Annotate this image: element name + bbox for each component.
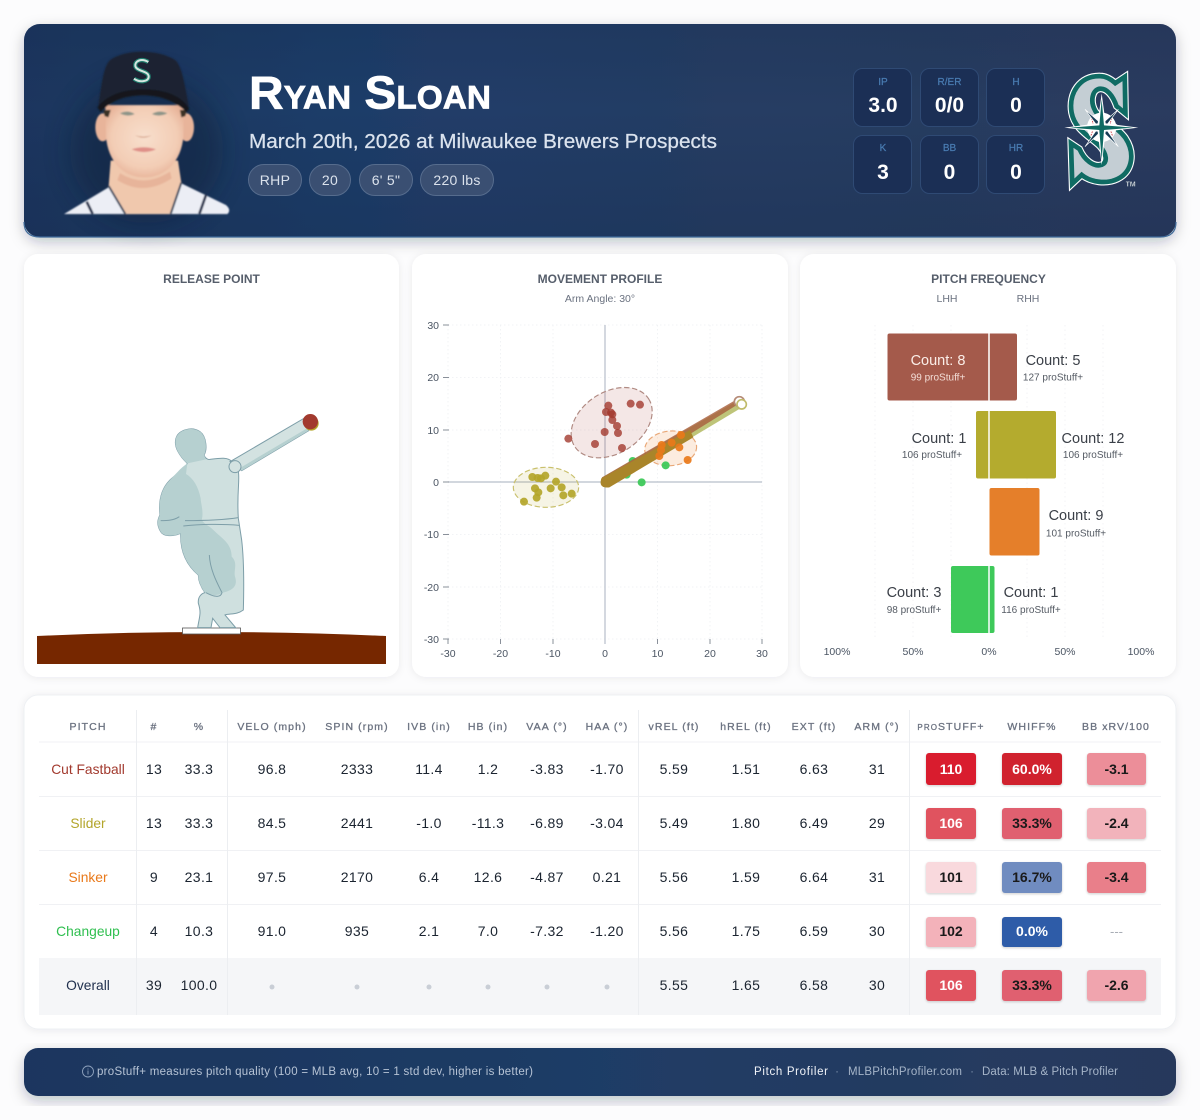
pitcher figure (158, 414, 319, 628)
row: cut fastball: 2333 (341, 761, 373, 777)
row: sinker: 31 (869, 869, 885, 885)
row: slider: -1.0 (416, 815, 442, 831)
row: sinker: 97.5 (258, 869, 286, 885)
movement scatter chart: -10 (545, 648, 561, 660)
heading: release point: RELEASE POINT (163, 272, 261, 286)
bar row: cut fastball: Count: 5 (1026, 353, 1080, 369)
row: overall: 106 (939, 977, 963, 993)
row: overall: 1.65 (732, 977, 760, 993)
icon: team logo: TM (1126, 182, 1136, 189)
row: cut fastball: -1.70 (590, 761, 624, 777)
row: changeup: 102 (939, 923, 963, 939)
stat tiles: 0 (944, 161, 955, 184)
row: changeup (56, 917, 1123, 947)
frequency axis: 50% (902, 646, 924, 658)
row: slider: 29 (869, 815, 885, 831)
panel: pitch metrics table (24, 695, 1176, 1029)
bar row: sinker: 101 proStuff+ (1046, 528, 1106, 540)
bar row: sinker (990, 488, 1106, 556)
row: slider: -2.4 (1104, 815, 1129, 831)
credits: · (835, 1066, 839, 1078)
header banner (24, 24, 1176, 237)
stat tiles: 0 (1010, 161, 1022, 184)
row: sinker: -4.87 (530, 869, 564, 885)
row: cut fastball: -3.83 (530, 761, 564, 777)
row: cut fastball (51, 753, 1146, 785)
bar row: changeup (887, 566, 1061, 633)
stat tiles: 0 (1010, 94, 1022, 117)
credits: Pitch Profiler (754, 1066, 828, 1078)
movement scatter chart: 20 (704, 648, 716, 660)
row: changeup: 2.1 (419, 923, 439, 939)
stat tiles: BB (943, 143, 956, 154)
movement scatter chart: 30 (756, 648, 768, 660)
bar row: slider: 106 proStuff+ (902, 450, 962, 461)
movement scatter chart: 0 (602, 648, 608, 660)
row: slider: 6.49 (800, 815, 828, 831)
row: sinker: 16.7% (1012, 869, 1052, 885)
table header: % (194, 721, 204, 733)
row: sinker: 9 (150, 869, 158, 885)
stat tiles: K (880, 143, 887, 154)
frequency axis: 50% (1054, 646, 1076, 658)
arm angle note: Arm Angle: 30° (565, 293, 635, 305)
row: slider: Slider (70, 816, 106, 831)
row: changeup: -7.32 (530, 923, 564, 939)
row: changeup: 7.0 (478, 923, 498, 939)
row: slider: 1.80 (732, 815, 760, 831)
row: changeup: 1.75 (732, 923, 760, 939)
row: sinker: 0.21 (593, 869, 621, 885)
game line: March 20th, 2026 at Milwaukee Brewers Prospects (249, 130, 717, 153)
row: cut fastball: 6.63 (800, 761, 828, 777)
row: slider: 33.3% (1012, 815, 1052, 831)
row: slider: 5.49 (660, 815, 688, 831)
row: sinker: 2170 (341, 869, 373, 885)
row: sinker: 101 (939, 869, 963, 885)
stat tiles: H (1012, 77, 1020, 88)
movement scatter chart (424, 320, 768, 660)
row: overall: Overall (66, 978, 110, 993)
row: overall: 30 (869, 977, 885, 993)
row: slider: 33.3 (185, 815, 213, 831)
table header (70, 721, 1150, 733)
row: cut fastball: Cut Fastball (51, 762, 125, 777)
row: changeup: 30 (869, 923, 885, 939)
row: sinker: -3.4 (1104, 869, 1129, 885)
row: sinker (68, 862, 1146, 893)
credits: MLBPitchProfiler.com (848, 1066, 962, 1078)
row: changeup: 10.3 (185, 923, 213, 939)
footer bar (24, 1048, 1176, 1096)
credits: Data: MLB & Pitch Profiler (982, 1066, 1118, 1078)
row: sinker: 23.1 (185, 869, 213, 885)
frequency bar chart (824, 325, 1154, 658)
row: cut fastball: 31 (869, 761, 885, 777)
row: slider: 2441 (341, 815, 373, 831)
heading: movement profile: MOVEMENT PROFILE (538, 272, 662, 286)
movement scatter chart: -30 (424, 634, 439, 646)
stat tiles (854, 68, 1044, 194)
row: overall: -2.6 (1104, 977, 1129, 993)
table header: VELO (mph) (237, 721, 307, 733)
player pills: 20 (322, 172, 338, 188)
row: overall: 33.3% (1012, 977, 1052, 993)
row: slider (70, 808, 1146, 839)
row: slider: 106 (939, 815, 963, 831)
bar row: changeup: 98 proStuff+ (887, 605, 941, 616)
frequency axis: 100% (1128, 646, 1154, 658)
row: cut fastball: 5.59 (660, 761, 688, 777)
row: changeup: 935 (345, 923, 369, 939)
row: slider: -3.04 (590, 815, 624, 831)
movement scatter chart: 10 (652, 648, 663, 660)
row: overall (66, 970, 1146, 1001)
hand labels: LHH (936, 293, 958, 305)
stat tiles: 3.0 (868, 94, 898, 117)
row: overall: 5.55 (660, 977, 688, 993)
table header: HB (in) (468, 721, 508, 733)
bar row: slider: Count: 12 (1062, 431, 1124, 447)
bar row: slider: Count: 1 (912, 431, 966, 447)
bar row: changeup: Count: 1 (1004, 585, 1058, 601)
player name: Ryan Sloan (249, 66, 491, 118)
bar row: cut fastball: 127 proStuff+ (1023, 372, 1083, 384)
row: slider: -11.3 (472, 815, 504, 831)
movement scatter chart: 20 (427, 372, 439, 384)
table header: # (151, 721, 157, 733)
movement scatter chart: 0 (433, 477, 439, 489)
stat tiles: 0/0 (935, 94, 964, 117)
bar row: cut fastball (888, 334, 1083, 400)
frequency axis: 100% (824, 646, 850, 658)
table header: IVB (in) (407, 721, 451, 733)
row: sinker: 5.56 (660, 869, 688, 885)
row: sinker: 12.6 (474, 869, 502, 885)
row: slider: 13 (146, 815, 162, 831)
table header: BB xRV/100 (1082, 721, 1150, 733)
hand labels: RHH (1017, 293, 1039, 305)
row: changeup: 91.0 (258, 923, 286, 939)
bar row: changeup: Count: 3 (887, 585, 941, 601)
bar row: sinker: Count: 9 (1049, 508, 1103, 524)
player photo (64, 52, 229, 223)
bar row: cut fastball: 99 proStuff+ (911, 372, 965, 384)
movement scatter chart: 10 (427, 425, 439, 437)
panel: movement profile (412, 254, 788, 677)
credits: · (970, 1066, 974, 1078)
row: overall: 6.58 (800, 977, 828, 993)
row: changeup: 6.59 (800, 923, 828, 939)
movement scatter chart: -20 (424, 582, 439, 594)
row: cut fastball: 11.4 (415, 761, 443, 777)
table header: vREL (ft) (649, 721, 699, 733)
row: cut fastball: 1.51 (732, 761, 760, 777)
methodology note: proStuff+ measures pitch quality (100 = MLB avg, 10 = 1 std dev, higher is better) (97, 1066, 533, 1078)
stat tiles: HR (1009, 143, 1023, 154)
row: sinker: 6.4 (419, 869, 439, 885)
movement scatter chart: -10 (424, 529, 439, 541)
movement scatter chart: -20 (493, 648, 508, 660)
bar row: slider (902, 411, 1124, 478)
table header: WHIFF% (1007, 721, 1057, 733)
row: cut fastball: -3.1 (1104, 761, 1129, 777)
row: cut fastball: 60.0% (1012, 761, 1052, 777)
release point markers (303, 414, 319, 431)
row: overall: 39 (146, 977, 162, 993)
row: cut fastball: 96.8 (258, 761, 286, 777)
stat tiles: IP (878, 77, 888, 88)
bar row: cut fastball: Count: 8 (911, 353, 965, 369)
row: sinker: 6.64 (800, 869, 828, 885)
frequency axis (824, 646, 1154, 658)
row: slider: 84.5 (258, 815, 286, 831)
row: changeup: 4 (150, 923, 158, 939)
bar row: slider: 106 proStuff+ (1063, 450, 1123, 461)
table header: ARM (°) (854, 721, 900, 733)
credits (754, 1066, 1118, 1078)
heading: pitch frequency: PITCH FREQUENCY (931, 272, 1046, 286)
row: cut fastball: 13 (146, 761, 162, 777)
hand labels (936, 293, 1039, 305)
row: changeup: --- (1110, 924, 1123, 939)
row: cut fastball: 110 (940, 761, 963, 777)
table header: PROSTUFF+ (917, 721, 985, 733)
row: slider: -6.89 (530, 815, 564, 831)
row: cut fastball: 33.3 (185, 761, 213, 777)
icon: info (82, 1066, 94, 1077)
table header: HAA (°) (586, 721, 628, 733)
player pills (248, 164, 494, 196)
stat tiles: R/ER (938, 77, 961, 88)
movement scatter chart: 30 (427, 320, 439, 332)
panel: release point (24, 254, 399, 677)
pitcher's mound (37, 628, 386, 664)
row: changeup: Changeup (56, 924, 120, 939)
player pills: 6' 5" (372, 172, 400, 188)
row: changeup: 0.0% (1016, 923, 1049, 939)
frequency axis: 0% (981, 646, 997, 658)
table header: SPIN (rpm) (325, 721, 389, 733)
icon: team logo (1064, 76, 1138, 189)
overall row background (39, 958, 1161, 1015)
row: cut fastball: 1.2 (478, 761, 498, 777)
row: changeup: 5.56 (660, 923, 688, 939)
table header: EXT (ft) (792, 721, 836, 733)
table header: hREL (ft) (720, 721, 772, 733)
player pills: RHP (260, 172, 290, 188)
player pills: 220 lbs (433, 172, 481, 188)
panel: pitch frequency (800, 254, 1176, 677)
row: sinker: Sinker (68, 870, 108, 885)
table header: VAA (°) (526, 721, 568, 733)
row: overall: 100.0 (181, 977, 217, 993)
row: sinker: 1.59 (732, 869, 760, 885)
movement scatter chart: -30 (440, 648, 456, 660)
stat tiles: 3 (877, 161, 889, 184)
bar row: changeup: 116 proStuff+ (1001, 605, 1061, 616)
row: changeup: -1.20 (590, 923, 624, 939)
table header: PITCH (70, 721, 106, 733)
